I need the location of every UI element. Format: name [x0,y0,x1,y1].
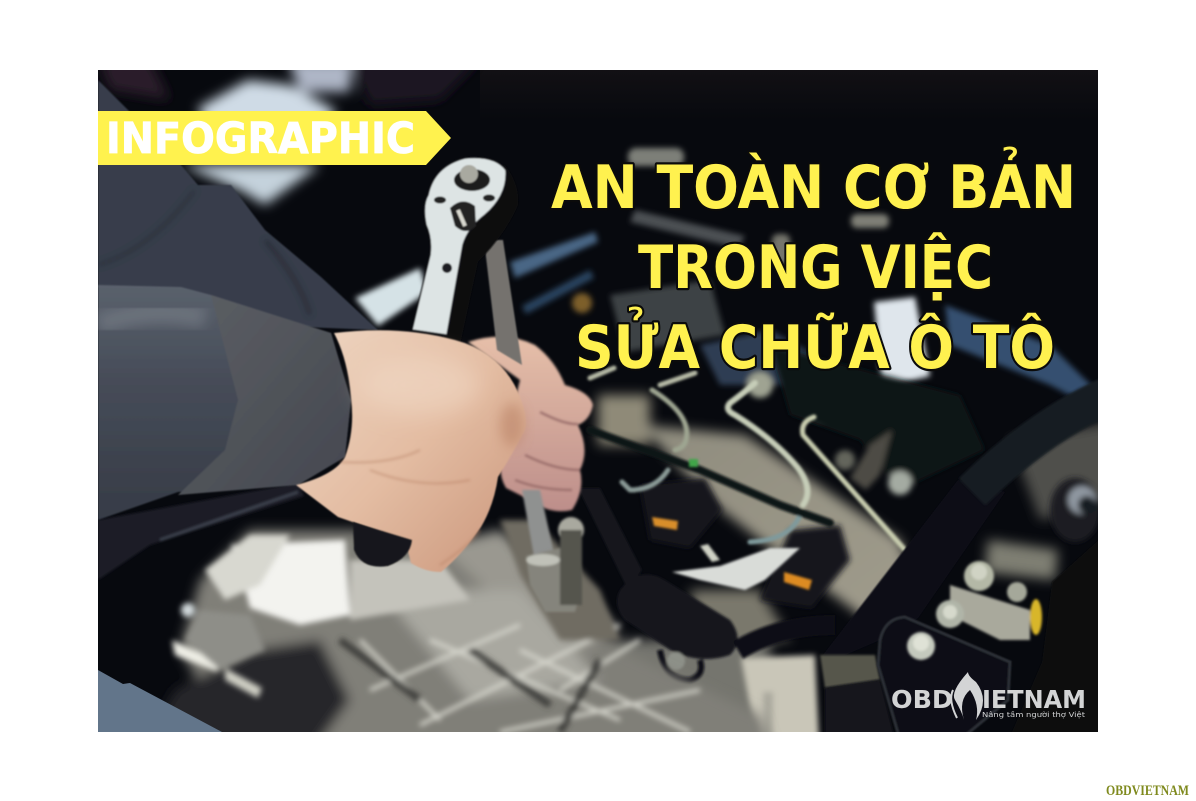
wrench rubber handle [353,522,412,567]
engine cover: polished metal at the bottom [98,516,772,732]
blurred background under the hood [98,60,1098,445]
logo: OBD Vietnam: Nâng tầm người thợ Việt [982,711,1085,719]
bolts and bracket on the right [876,559,1064,732]
second hand holding the long wrench [468,337,593,511]
under sleeve dark strap [98,483,304,580]
logo: OBD Vietnam: IETNAM [982,685,1086,714]
logo: OBD Vietnam: OBD [891,685,953,714]
ratchet wrench in the main hand [412,156,507,336]
upper sleeve [98,80,378,330]
black strap and ribbed hose [820,395,1110,760]
black connector and harness [578,488,835,680]
lower sleeve and cuff [98,285,351,520]
banner: INFOGRAPHIC: INFOGRAPHIC [106,114,415,164]
long wrench bar and socket [484,240,584,612]
blue-grey panel, lower left [98,670,222,732]
engine block: pipes and cables [580,350,1098,732]
title: AN TOÀN CƠ BẢN [551,145,1076,223]
title [551,145,1076,383]
logo: OBD Vietnam [891,672,1086,720]
title: SỬA CHỮA Ô TÔ [575,305,1055,383]
main fist [296,330,526,572]
photo: mechanic repairing an engine [98,60,1120,770]
title: TRONG VIỆC [638,232,993,303]
